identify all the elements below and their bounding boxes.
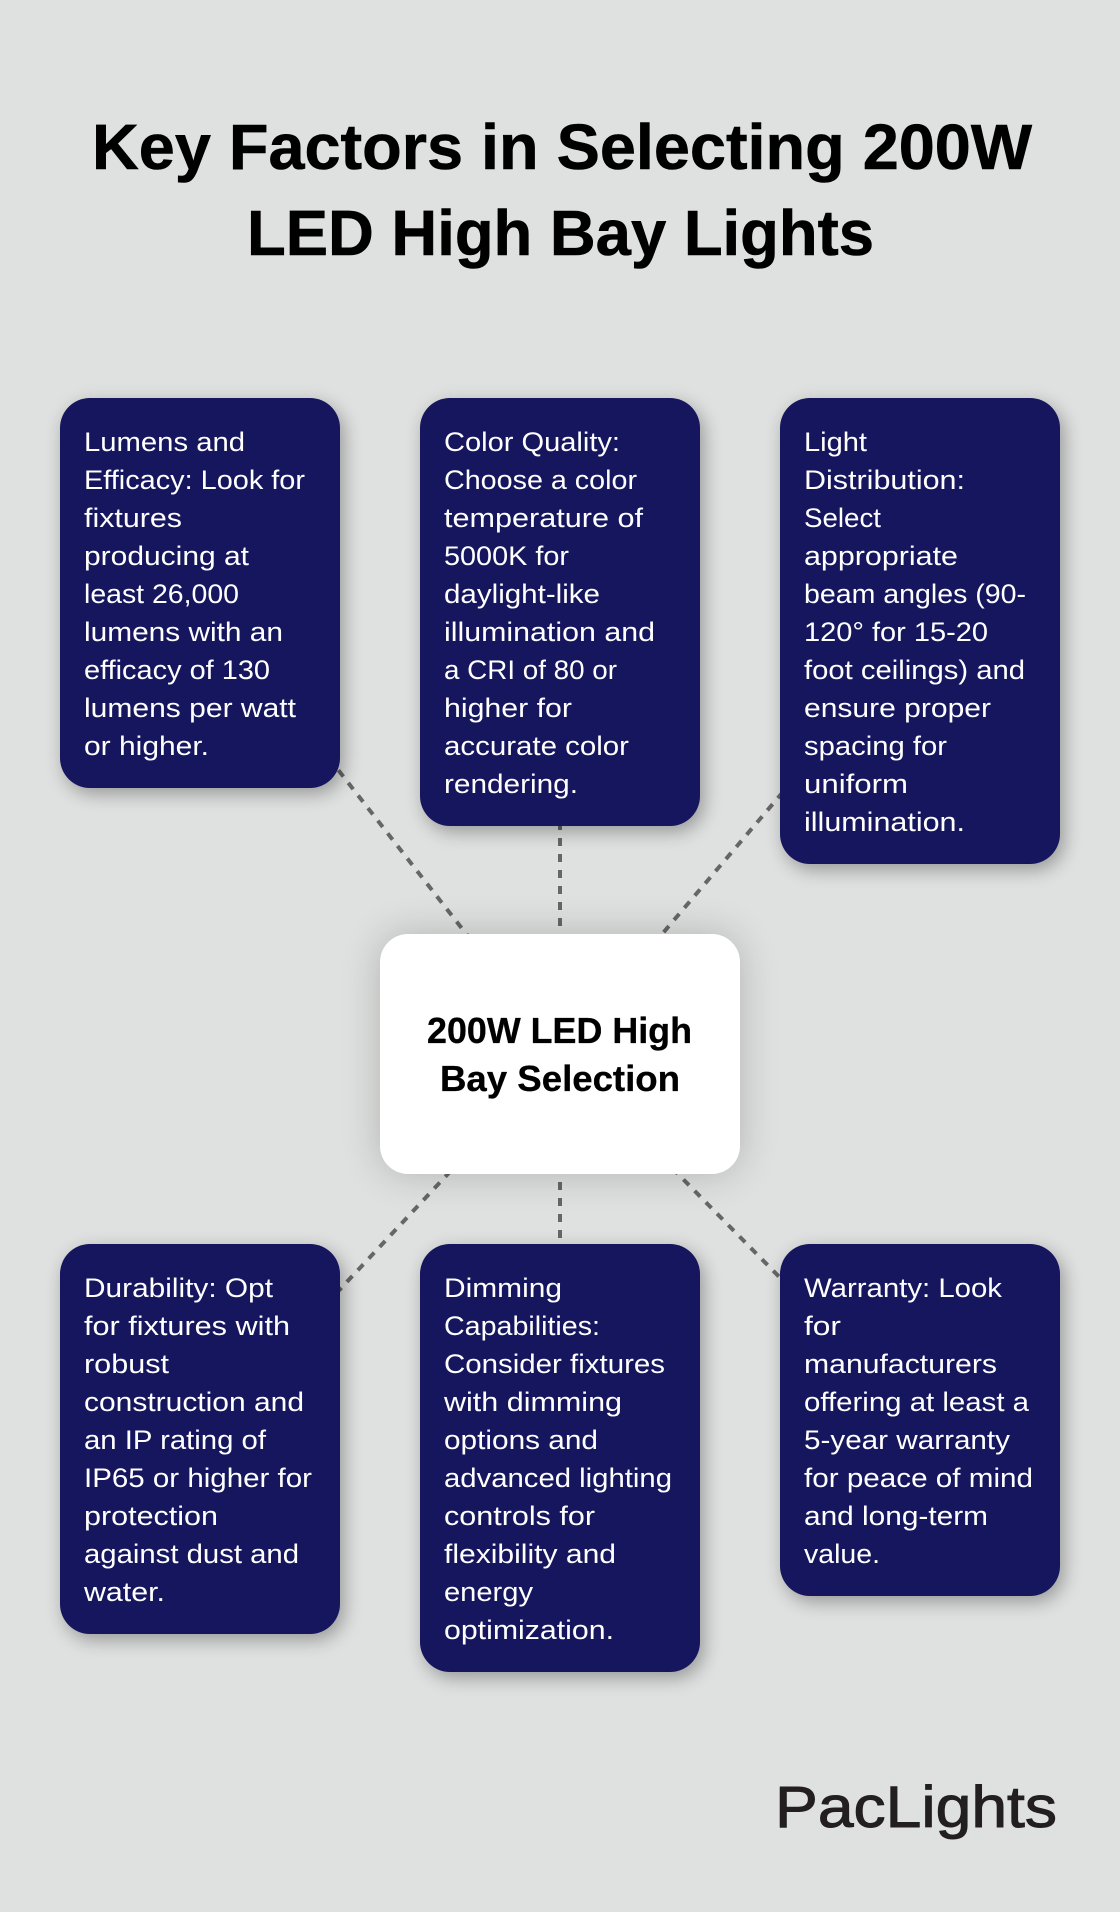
center node [380, 934, 740, 1174]
panel: light distribution: 120° for 15-20 [804, 617, 988, 647]
panel: durability: water. [83, 1577, 165, 1607]
panel: color quality: illumination and [444, 617, 655, 647]
panel: lumens and efficacy: producing at [84, 541, 250, 571]
panel: light distribution: ensure proper [804, 693, 991, 723]
panel: color quality: 5000K for [444, 541, 569, 571]
panel: durability: Durability: Opt [84, 1273, 274, 1303]
panel: light distribution: Select [804, 503, 882, 533]
panel: warranty: Warranty: Look [804, 1273, 1003, 1303]
panel: color quality: accurate color [444, 731, 629, 761]
panel: durability: an IP rating of [84, 1425, 267, 1455]
panel: warranty: and long-term [804, 1501, 988, 1531]
panel: dimming capabilities: with dimming [443, 1387, 622, 1417]
panel: durability: IP65 or higher for [84, 1463, 312, 1493]
panel: light distribution: foot ceilings) and [804, 655, 1025, 685]
panel: lumens and efficacy: lumens with an [84, 617, 283, 647]
panel: light distribution: beam angles (90- [804, 579, 1026, 609]
panel: durability: protection [84, 1501, 218, 1531]
panel: color quality: rendering. [444, 769, 578, 799]
panel: light distribution: Light [804, 427, 868, 457]
panel: warranty: for peace of mind [804, 1463, 1033, 1493]
panel: color quality: higher for [444, 693, 572, 723]
panel: durability: against dust and [84, 1539, 299, 1569]
panel: warranty: for [804, 1311, 841, 1341]
panel: light distribution: spacing for [804, 731, 947, 761]
panel: light distribution: appropriate [804, 541, 958, 571]
panel: durability [60, 1244, 340, 1634]
panel: light distribution: uniform [804, 769, 908, 799]
panel: color quality [420, 398, 700, 826]
center node: 200W LED High [427, 1010, 692, 1051]
panel: dimming capabilities: options and [444, 1425, 598, 1455]
panel: dimming capabilities: optimization. [444, 1615, 614, 1645]
panel: durability: robust [84, 1349, 170, 1379]
panel: lumens and efficacy: or higher. [84, 731, 209, 761]
panel: dimming capabilities: Capabilities: [444, 1311, 600, 1341]
panel: warranty: offering at least a [804, 1387, 1030, 1417]
panel: dimming capabilities [420, 1244, 700, 1672]
panel: light distribution [780, 398, 1060, 864]
panel: durability: construction and [84, 1387, 304, 1417]
panel: warranty: 5-year warranty [804, 1425, 1011, 1455]
panel: dimming capabilities: controls for [444, 1501, 595, 1531]
title: LED High Bay Lights [247, 197, 874, 269]
panel: warranty [780, 1244, 1060, 1596]
panel: dimming capabilities: advanced lighting [444, 1463, 672, 1493]
panel: durability: for fixtures with [84, 1311, 290, 1341]
panel: lumens and efficacy: Lumens and [84, 427, 245, 457]
panel: lumens and efficacy: least 26,000 [84, 579, 239, 609]
panel: color quality: Choose a color [444, 465, 637, 495]
title: Key Factors in Selecting 200W [92, 111, 1033, 183]
panel: dimming capabilities: Consider fixtures [444, 1349, 665, 1379]
panel: warranty: manufacturers [804, 1349, 997, 1379]
panel: color quality: Color Quality: [444, 427, 620, 457]
panel: dimming capabilities: Dimming [444, 1273, 562, 1303]
title [92, 111, 1033, 269]
center node: Bay Selection [440, 1058, 680, 1099]
panel: warranty: value. [804, 1539, 880, 1569]
panel: color quality: temperature of [444, 503, 644, 533]
panel: lumens and efficacy [60, 398, 340, 788]
panel: light distribution: Distribution: [804, 465, 965, 495]
logo: PacLights: PacLights [775, 1775, 1057, 1840]
panel: lumens and efficacy: Efficacy: Look for [84, 465, 305, 495]
panel: lumens and efficacy: fixtures [84, 503, 182, 533]
panel: color quality: daylight-like [444, 579, 600, 609]
panel: dimming capabilities: flexibility and [444, 1539, 616, 1569]
panel: lumens and efficacy: lumens per watt [84, 693, 297, 723]
panel: color quality: a CRI of 80 or [444, 655, 617, 685]
panel: light distribution: illumination. [804, 807, 965, 837]
panel: dimming capabilities: energy [444, 1577, 534, 1607]
panel: lumens and efficacy: efficacy of 130 [84, 655, 270, 685]
